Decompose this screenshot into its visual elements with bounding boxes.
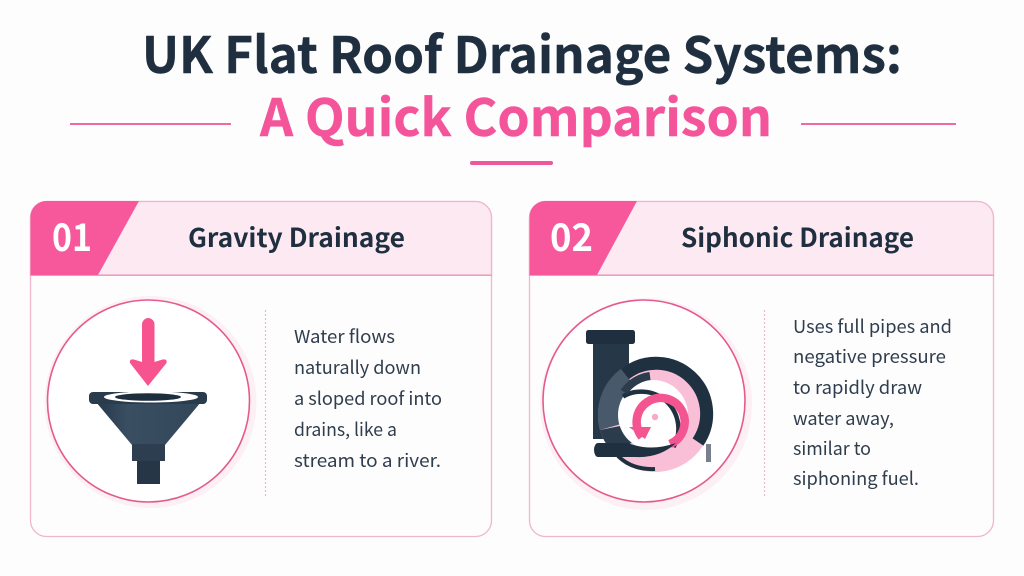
subtitle: A Quick Comparison xyxy=(259,77,772,151)
panel: gravity drainage xyxy=(30,201,492,536)
icon: funnel drain with arrow xyxy=(44,296,256,508)
panel header band xyxy=(30,202,492,275)
number badge xyxy=(30,201,139,275)
divider xyxy=(764,310,766,498)
divider xyxy=(264,310,266,498)
description text: drains, like a xyxy=(294,416,397,442)
description text: siphoning fuel. xyxy=(793,465,919,491)
title xyxy=(142,16,902,151)
subtitle rule: left xyxy=(70,123,231,125)
description text xyxy=(793,313,952,491)
description text: to rapidly draw xyxy=(793,374,922,400)
description text: Uses full pipes and xyxy=(793,313,952,339)
description text: water away, xyxy=(793,405,894,431)
title underline xyxy=(470,161,553,165)
subtitle rule: right xyxy=(801,123,956,125)
description text: naturally down xyxy=(294,354,421,380)
number: 02 xyxy=(550,207,593,262)
panel: siphonic drainage xyxy=(529,201,994,536)
description text: stream to a river. xyxy=(294,447,441,473)
number badge xyxy=(530,201,637,275)
description text: a sloped roof into xyxy=(294,385,442,411)
title: UK Flat Roof Drainage Systems: xyxy=(142,16,902,88)
icon: siphonic pipe with swirl xyxy=(540,298,752,510)
description text: negative pressure xyxy=(793,343,946,369)
number: 01 xyxy=(52,207,92,262)
description text: similar to xyxy=(793,435,871,461)
description text xyxy=(294,323,442,473)
heading: Siphonic Drainage xyxy=(681,218,914,255)
description text: Water flows xyxy=(294,323,395,349)
panel header band xyxy=(530,202,994,275)
heading: Gravity Drainage xyxy=(188,218,405,255)
